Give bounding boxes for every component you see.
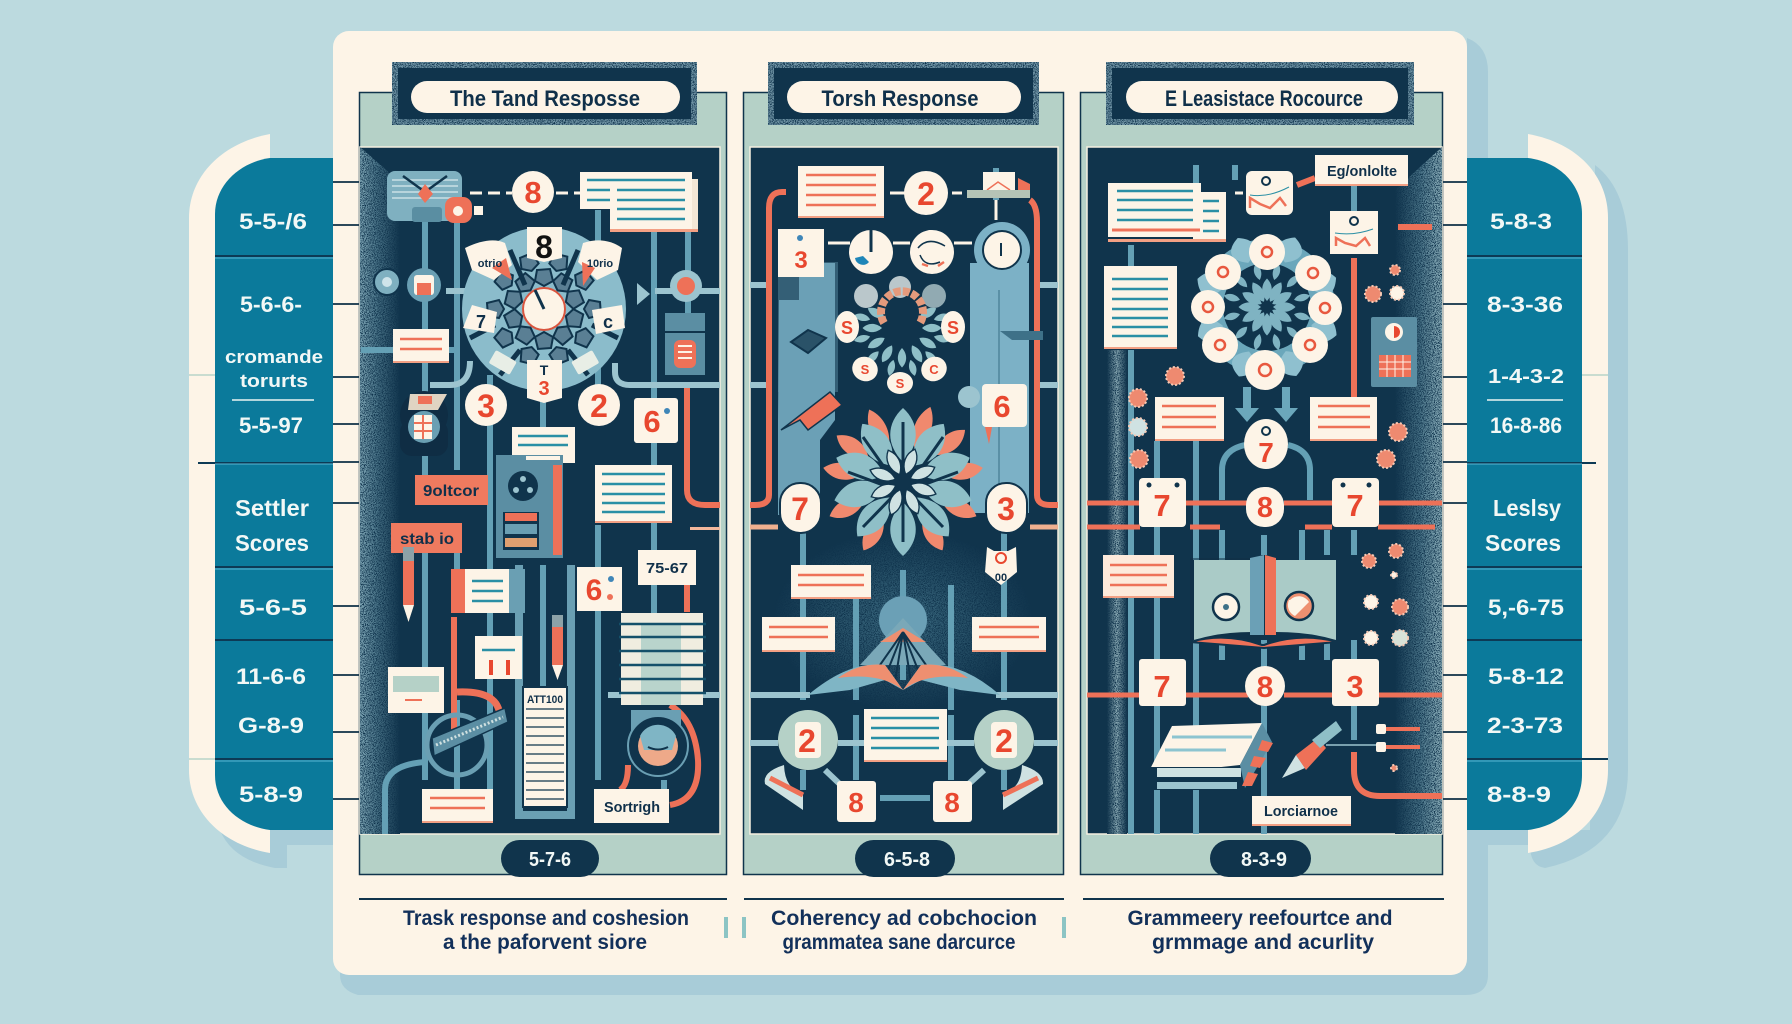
clock wheel: c xyxy=(603,312,613,332)
right sidebar labels: 5,-6-75 xyxy=(1488,595,1564,620)
number 7 badge: 7 xyxy=(791,491,809,527)
coral burst icon xyxy=(670,270,702,302)
right bracket shadow xyxy=(1467,165,1628,868)
coral label xyxy=(415,475,488,505)
number 5 card xyxy=(778,229,824,277)
grey note xyxy=(388,667,444,713)
clock circle xyxy=(849,230,893,274)
number 3 card right lower xyxy=(1332,659,1379,706)
number 8 card left xyxy=(837,781,876,822)
tray icon xyxy=(967,172,1030,198)
right sidebar labels: 2-3-73 xyxy=(1487,713,1563,738)
right sidebar labels: Leslsy xyxy=(1493,495,1561,521)
number 7 card right upper: 7 xyxy=(1346,488,1364,523)
panel 2 frame xyxy=(744,92,1064,874)
center teal note xyxy=(864,709,947,762)
panel 3 caption: Grammeery reefourtce and xyxy=(1128,907,1392,930)
number 7 card left lower: 7 xyxy=(1153,669,1171,704)
panel 1 caption: Trask response and coshesion xyxy=(403,907,689,930)
number 7 card left lower xyxy=(1139,659,1186,706)
note cards top right xyxy=(580,172,698,232)
large flower xyxy=(822,404,984,556)
small 1-1 card xyxy=(475,636,522,679)
label card bottom: Sortrigh xyxy=(604,799,660,816)
panel 3: lexical resource xyxy=(1080,62,1444,954)
number 3 card right lower: 3 xyxy=(1346,669,1364,704)
left bracket and score sidebar xyxy=(189,134,333,868)
left sidebar labels: Scores xyxy=(235,530,309,556)
open notebook stack xyxy=(1147,723,1273,790)
label card top right: Eg/onlolte xyxy=(1327,163,1397,180)
label card bottom: Lorciarnoe xyxy=(1264,803,1338,820)
panel 3 connectors xyxy=(1087,165,1442,834)
panel 2 score pill xyxy=(855,840,955,877)
number 6 card xyxy=(634,398,678,443)
stacked pages xyxy=(619,613,706,705)
right cream bracket xyxy=(1528,134,1608,853)
panel 1 caption xyxy=(359,899,727,954)
small flower ring xyxy=(835,276,965,394)
left sidebar labels: 5-5-/6 xyxy=(239,209,307,234)
left sidebar labels: 5-5-97 xyxy=(239,413,303,438)
shield icon xyxy=(985,547,1017,585)
number 5 card: 3 xyxy=(794,247,808,274)
panel 2 steel columns xyxy=(778,262,1029,515)
panel 3 dark interior xyxy=(1087,147,1442,834)
number 8 circle: 8 xyxy=(524,175,542,210)
lens and number 6 card xyxy=(958,384,1027,444)
label card bottom xyxy=(1252,796,1351,826)
small flower ring: S xyxy=(947,318,959,338)
shield icon: 00 xyxy=(995,572,1007,584)
down arrows xyxy=(1235,387,1298,422)
medallion 2 right: 2 xyxy=(995,723,1013,759)
number 7 oval: 7 xyxy=(1258,437,1274,468)
clock wheel: T xyxy=(540,362,549,378)
coral label 2 xyxy=(391,523,462,553)
small blossoms xyxy=(1129,265,1408,771)
chart card right xyxy=(1330,211,1378,254)
side marks between panels xyxy=(726,917,1064,938)
medallion 2 left: 2 xyxy=(798,723,816,759)
left sidebar labels: 5-6-6- xyxy=(240,292,302,317)
small connector squares xyxy=(1376,724,1420,752)
hat and marker icons xyxy=(781,330,1043,430)
right sidebar labels: 5-8-12 xyxy=(1488,664,1564,689)
device icon xyxy=(665,313,705,375)
coral note bottom left xyxy=(422,789,493,823)
number 8 circle upper: 8 xyxy=(1257,492,1273,524)
number 8 circle lower xyxy=(1245,666,1285,706)
panel 3 frame xyxy=(1080,92,1442,874)
tick marks xyxy=(333,182,1467,799)
large round flower xyxy=(1191,233,1342,390)
right sidebar labels xyxy=(1485,209,1564,807)
left sidebar labels: torurts xyxy=(240,371,308,391)
number 6 card lower xyxy=(577,567,622,611)
right sidebar labels: 8-3-36 xyxy=(1487,292,1563,317)
panel 1 frame xyxy=(360,92,726,874)
teal note behind device xyxy=(512,427,575,463)
folder and grid icon xyxy=(400,391,448,456)
card shadow xyxy=(340,38,1488,995)
panel 2 caption: grammatea sane darcurce xyxy=(782,931,1016,954)
teal note stack xyxy=(1108,183,1226,242)
panel 3 caption: grmmage and acurlity xyxy=(1152,931,1374,954)
medallion 2 left xyxy=(778,710,838,770)
dial circle xyxy=(910,230,954,274)
left sidebar labels: cromande xyxy=(225,347,323,367)
panel 2 caption: Coherency ad cobchocion xyxy=(771,907,1037,930)
left sidebar labels: G-8-9 xyxy=(238,713,304,738)
panel 2 dark interior xyxy=(750,147,1058,834)
clock wheel: otrio xyxy=(478,258,502,270)
small flower ring: S xyxy=(841,318,853,338)
clock wheel: 10rio xyxy=(587,258,613,270)
number 7 badge xyxy=(780,483,821,533)
number 8 circle lower: 8 xyxy=(1257,671,1273,704)
number 7 oval xyxy=(1244,419,1288,469)
label card bottom xyxy=(594,789,669,823)
number 3 badge xyxy=(986,483,1027,533)
number 2 circle xyxy=(578,384,620,426)
panel 1 dark interior xyxy=(360,147,720,834)
gauge xyxy=(974,222,1030,278)
right bracket and score sidebar xyxy=(1467,134,1628,868)
number 6 card lower: 6 xyxy=(586,574,602,607)
coral loop and ribbon xyxy=(427,692,508,775)
number 7 card left upper: 7 xyxy=(1153,488,1171,523)
number 7 card right upper xyxy=(1332,478,1379,527)
small flower ring: S xyxy=(861,362,870,377)
left sidebar labels: 5-6-5 xyxy=(239,595,307,620)
left bracket shadow xyxy=(220,830,333,868)
panel 1 header: The Tand Resposse xyxy=(450,86,640,111)
right sidebar dividers xyxy=(1467,256,1608,761)
left sidebar labels: 11-6-6 xyxy=(236,664,306,689)
chart card top xyxy=(1246,171,1293,215)
panel 2 glow behind flowers xyxy=(773,530,1033,710)
number 8 card left: 8 xyxy=(848,787,864,818)
tall list xyxy=(523,687,567,807)
main cream card xyxy=(333,31,1467,975)
pencil left xyxy=(403,547,414,622)
coral note lower left xyxy=(1103,555,1174,598)
coral label: 9oltcor xyxy=(423,483,479,500)
panel 2: coherence xyxy=(744,62,1064,954)
teal list note xyxy=(1104,266,1177,349)
right sidebar labels: 8-8-9 xyxy=(1487,782,1551,807)
number 8 circle xyxy=(512,171,554,213)
number 3 badge: 3 xyxy=(997,491,1015,527)
coral edged note xyxy=(451,569,525,730)
coral notes middle xyxy=(762,565,1046,652)
device with calendar xyxy=(1371,317,1417,387)
left sidebar dividers xyxy=(189,256,333,761)
panel 1 caption: a the paforvent siore xyxy=(443,931,647,954)
panel 1 connector lines xyxy=(361,210,720,834)
number 8 circle upper xyxy=(1246,487,1284,527)
pencil right xyxy=(552,615,563,680)
clock wheel xyxy=(462,227,626,403)
pencil icon xyxy=(1282,721,1381,778)
panel 1 score pill xyxy=(501,840,599,877)
right sidebar labels: 16-8-86 xyxy=(1490,413,1562,438)
number 2 circle: 2 xyxy=(917,176,935,212)
panel 1: task response xyxy=(359,62,727,954)
number 2 circle: 2 xyxy=(590,388,608,424)
left cream bracket xyxy=(189,134,270,853)
tall list: ATT100 xyxy=(527,694,563,706)
panel 1 header xyxy=(392,62,697,125)
left sidebar labels: 5-8-9 xyxy=(239,782,303,807)
right sidebar labels: 5-8-3 xyxy=(1490,209,1552,234)
coral notes middle xyxy=(1155,397,1377,441)
open book with eyes xyxy=(1190,555,1338,648)
panel 1 score pill: 5-7-6 xyxy=(529,849,571,871)
left sidebar labels: Settler xyxy=(235,495,309,521)
lens and number 6 card: 6 xyxy=(993,389,1011,424)
teal note right xyxy=(595,465,672,523)
clock wheel: 3 xyxy=(538,378,550,400)
dashed connector xyxy=(470,192,580,194)
number 3 circle: 3 xyxy=(477,388,495,424)
panel 2 score pill: 6-5-8 xyxy=(884,849,930,871)
right sidebar labels: 1-4-3-2 xyxy=(1488,366,1564,388)
panel 2 header: Torsh Response xyxy=(822,86,978,111)
coral label 2: stab io xyxy=(400,531,454,548)
small flower ring: C xyxy=(929,362,939,377)
panel 3 caption xyxy=(1083,899,1444,954)
envelope icon xyxy=(387,171,483,223)
75-67 card: 75-67 xyxy=(646,560,688,577)
panel 3 score pill xyxy=(1210,840,1311,877)
camera lens xyxy=(628,710,688,776)
arc ribbons xyxy=(765,765,1043,810)
left sidebar body xyxy=(215,158,333,830)
panel 2 caption xyxy=(744,899,1064,954)
panel 2 header xyxy=(768,62,1039,125)
panel 3 header xyxy=(1106,62,1414,125)
number 2 circle xyxy=(904,171,948,215)
server device xyxy=(496,455,563,558)
open book with fan xyxy=(808,596,1000,695)
panel 3 header: E Leasistace Rocource xyxy=(1165,86,1363,111)
number 8 card right xyxy=(933,781,972,822)
coral note top xyxy=(798,166,884,218)
right sidebar labels: Scores xyxy=(1485,530,1561,556)
number 3 circle xyxy=(465,384,507,426)
left circles xyxy=(374,268,441,302)
clock wheel: 8 xyxy=(535,229,553,265)
right sidebar body xyxy=(1467,158,1582,830)
clock wheel: 7 xyxy=(476,312,486,332)
75-67 card xyxy=(638,550,696,585)
panel 2 connectors xyxy=(750,168,1058,798)
label card top right xyxy=(1315,155,1408,186)
medallion 2 right xyxy=(974,710,1034,770)
right icon arrow xyxy=(637,283,650,305)
number 8 card right: 8 xyxy=(944,787,960,818)
small flower ring: S xyxy=(896,376,905,391)
coral card left xyxy=(393,329,449,363)
left sidebar labels xyxy=(225,209,323,807)
number 7 card left upper xyxy=(1139,478,1186,527)
number 6 card: 6 xyxy=(643,404,661,439)
panel 3 score pill: 8-3-9 xyxy=(1241,849,1287,871)
